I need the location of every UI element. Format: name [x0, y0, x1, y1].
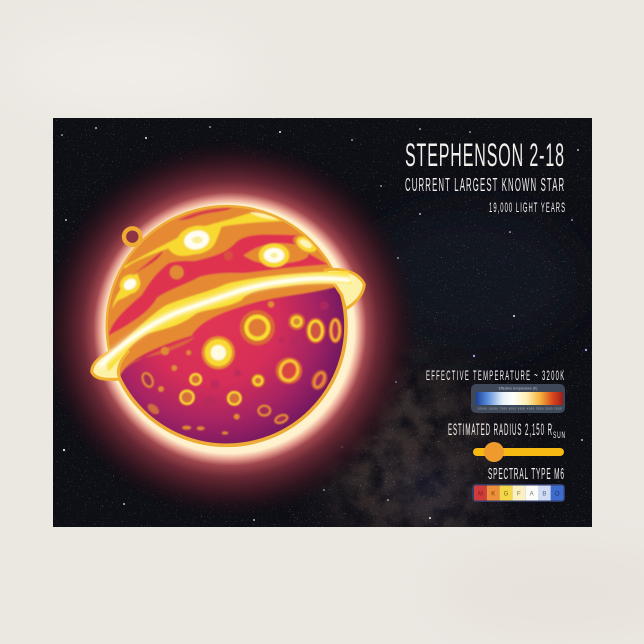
crater: bright — [202, 336, 235, 369]
chart: spectral swatches: O — [555, 492, 560, 498]
spot: upper left — [118, 274, 141, 294]
star glow — [40, 139, 420, 519]
chart: spectral swatches: M — [478, 492, 483, 498]
muted spots — [204, 301, 329, 408]
spot: far right — [296, 236, 318, 253]
surface bands — [105, 202, 352, 435]
band: main red storm band — [108, 234, 328, 336]
label: sun subscript: SUN — [553, 429, 565, 440]
panel: effective temperature — [426, 368, 565, 413]
heading: title block — [405, 138, 565, 216]
ring: yellow — [105, 271, 352, 372]
title: STEPHENSON 2-18 — [405, 138, 564, 174]
crater: small ring right — [288, 313, 305, 330]
craters — [140, 310, 342, 425]
band: red sliver top — [178, 208, 232, 220]
chart: temperature legend: 20000 10000 7500 6000 5000 4000 3500 3000 2500 — [478, 406, 562, 410]
ring: right end — [325, 269, 364, 309]
band: lower orange shade — [126, 336, 195, 368]
chart: temperature legend — [471, 384, 565, 413]
chart: spectral swatches: G — [504, 492, 509, 498]
chart: temperature legend: Effective temperature (K) — [499, 386, 537, 390]
band: orange lobe around right spot — [243, 243, 308, 264]
label: temperature: EFFECTIVE TEMPERATURE ~ 3200K — [426, 368, 565, 384]
crater: lower edge oval — [310, 370, 328, 391]
band: left yellow stripe — [112, 273, 139, 310]
spot: upper large — [178, 224, 216, 255]
panel: spectral type — [472, 465, 565, 502]
slider — [473, 442, 564, 462]
band: upper orange cap — [108, 208, 329, 342]
label: spectral type: SPECTRAL TYPE M6 — [488, 465, 564, 483]
ring: left end — [92, 348, 128, 379]
spot: upper right — [259, 243, 289, 267]
crater: lower large ring — [276, 357, 302, 384]
band: orange under ring — [110, 268, 335, 376]
icon: hook loop — [124, 228, 141, 245]
stars — [61, 126, 587, 521]
star speckle — [53, 118, 592, 527]
panel: estimated radius — [448, 419, 565, 462]
band: cream highlight top — [250, 212, 278, 220]
planet body — [107, 207, 346, 445]
chart: spectral swatches: B — [542, 492, 546, 498]
orange dots — [146, 251, 274, 435]
ring band — [92, 269, 364, 379]
band: yellow top stripe — [123, 213, 285, 268]
band: red sliver left — [115, 250, 163, 295]
subtitle: CURRENT LARGEST KNOWN STAR — [405, 175, 564, 196]
label: radius: ESTIMATED RADIUS 2,150 R — [448, 419, 552, 439]
chart: spectral swatches: K — [491, 492, 495, 498]
milky way nebula — [318, 234, 556, 527]
crater: oval ring — [306, 318, 326, 344]
crater: edge oval — [329, 317, 342, 343]
chart: spectral swatches — [472, 484, 565, 502]
small rings — [180, 374, 265, 405]
chart: spectral swatches: A — [530, 492, 534, 498]
distance: 19,000 LIGHT YEARS — [489, 200, 565, 216]
illustration: red giant star — [92, 202, 364, 445]
panel: starfield card — [53, 118, 592, 527]
chart: spectral swatches: F — [517, 492, 521, 498]
crater: large ring — [240, 310, 275, 345]
ring: hot core — [101, 279, 348, 365]
